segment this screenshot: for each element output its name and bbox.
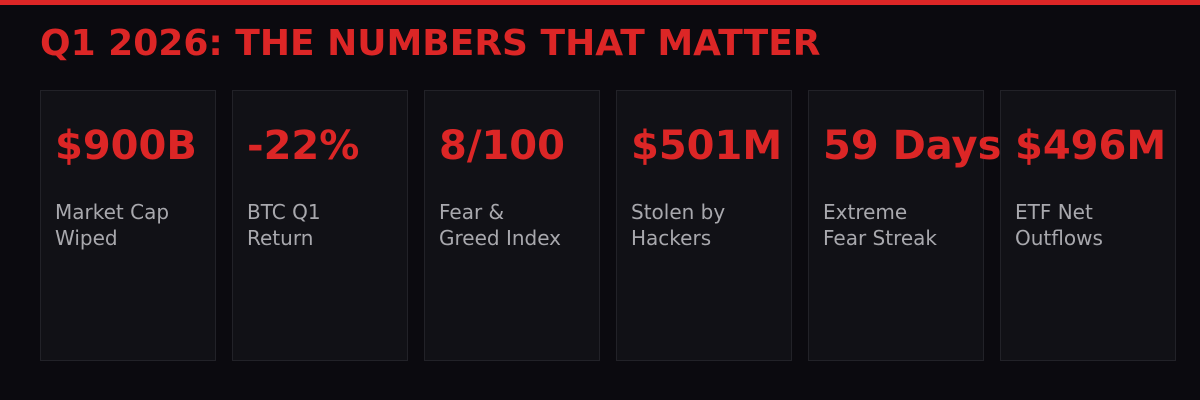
panel: btc return: BTC Q1 — [247, 200, 321, 224]
panel: etf outflows: Outflows — [1015, 226, 1103, 250]
panel: etf outflows — [1000, 90, 1176, 360]
panel: fear streak: Fear Streak — [823, 226, 937, 250]
panel: btc return: Return — [247, 226, 313, 250]
panel: stolen: Hackers — [631, 226, 711, 250]
panel: stolen: Stolen by — [631, 200, 725, 224]
panel: btc return — [232, 90, 408, 360]
panel: market cap: $900B — [55, 123, 197, 169]
panel: market cap: Market Cap — [55, 200, 169, 224]
panel: etf outflows: ETF Net — [1015, 200, 1093, 224]
panel: fear greed: Fear & — [439, 200, 504, 224]
panel: stolen: $501M — [631, 123, 782, 169]
panel: fear streak: Extreme — [823, 200, 907, 224]
panel: fear greed — [424, 90, 600, 360]
panel: fear greed: Greed Index — [439, 226, 561, 250]
panel: market cap: Wiped — [55, 226, 118, 250]
panel: fear streak — [808, 90, 1001, 360]
panel: etf outflows: $496M — [1015, 123, 1166, 169]
panel: fear streak: 59 Days — [823, 123, 1001, 169]
panel: fear greed: 8/100 — [439, 123, 565, 169]
panel: stolen — [616, 90, 792, 360]
title: Q1 2026: THE NUMBERS THAT MATTER — [40, 23, 821, 64]
panel: btc return: -22% — [247, 123, 359, 169]
panel: market cap — [40, 90, 216, 360]
